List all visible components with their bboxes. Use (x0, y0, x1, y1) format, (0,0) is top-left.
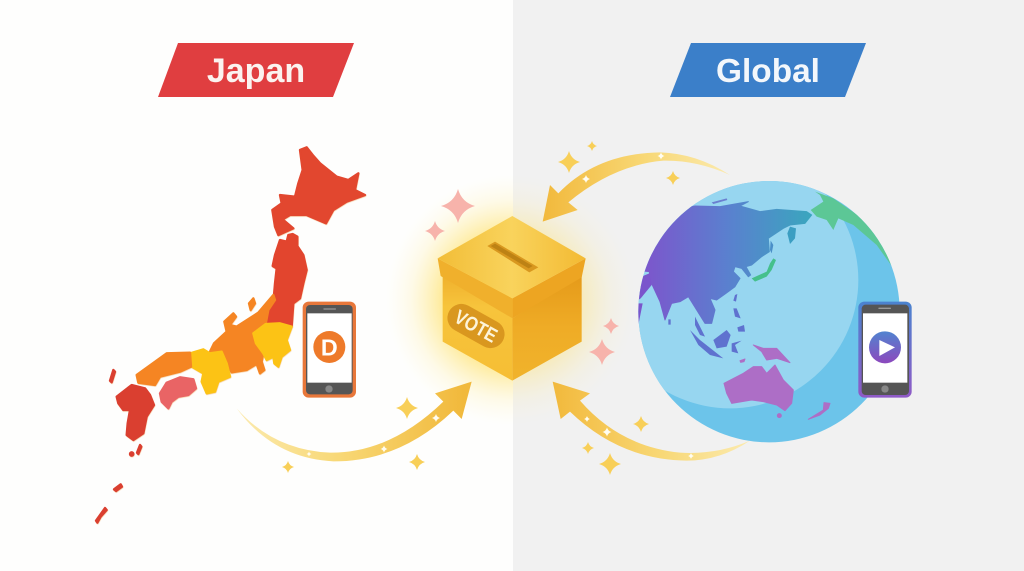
Asia (633, 202, 812, 323)
Arabia (638, 274, 652, 300)
VOTE label: VOTE (450, 306, 501, 347)
arrow: globe to box, upper (543, 152, 730, 222)
Kyushu (117, 385, 154, 440)
slot (487, 242, 538, 272)
Japan on globe (752, 258, 776, 282)
Shikoku (160, 377, 196, 408)
phone: video app (858, 302, 912, 398)
globe highlight (638, 181, 858, 408)
phone: D app: D (321, 334, 338, 360)
Kamchatka (787, 227, 796, 244)
heading: Japan banner (158, 43, 354, 97)
Kanto (253, 323, 292, 367)
heading: Japan banner: Japan (207, 52, 305, 90)
Chugoku (137, 353, 191, 385)
Oceania (724, 345, 830, 419)
North America (811, 192, 893, 268)
southern islands (96, 370, 141, 523)
Arctic island (712, 198, 727, 204)
Sakhalin (770, 241, 773, 253)
phone: D app (303, 302, 356, 398)
glow behind ballot box, right side (513, 170, 642, 432)
Hokkaido (272, 147, 365, 235)
heading: Global banner (670, 43, 866, 97)
Kansai (190, 349, 230, 393)
white sparkles on arrows (306, 152, 694, 459)
Southeast Asia islands (668, 294, 745, 358)
map: Japan (96, 147, 365, 523)
Sado island (249, 298, 255, 310)
arrow: globe to box, lower (553, 382, 750, 461)
background: right panel (513, 0, 1024, 571)
heading: Global banner: Global (716, 53, 820, 90)
glow behind ballot box, left side (380, 170, 513, 432)
arrow: Japan to box (237, 382, 472, 461)
pink sparkles (425, 189, 619, 365)
Tohoku (266, 234, 307, 327)
Chubu (210, 295, 275, 373)
gold sparkles (282, 141, 680, 475)
globe (638, 181, 900, 442)
background: left panel (0, 0, 513, 571)
ballot box (438, 216, 586, 381)
